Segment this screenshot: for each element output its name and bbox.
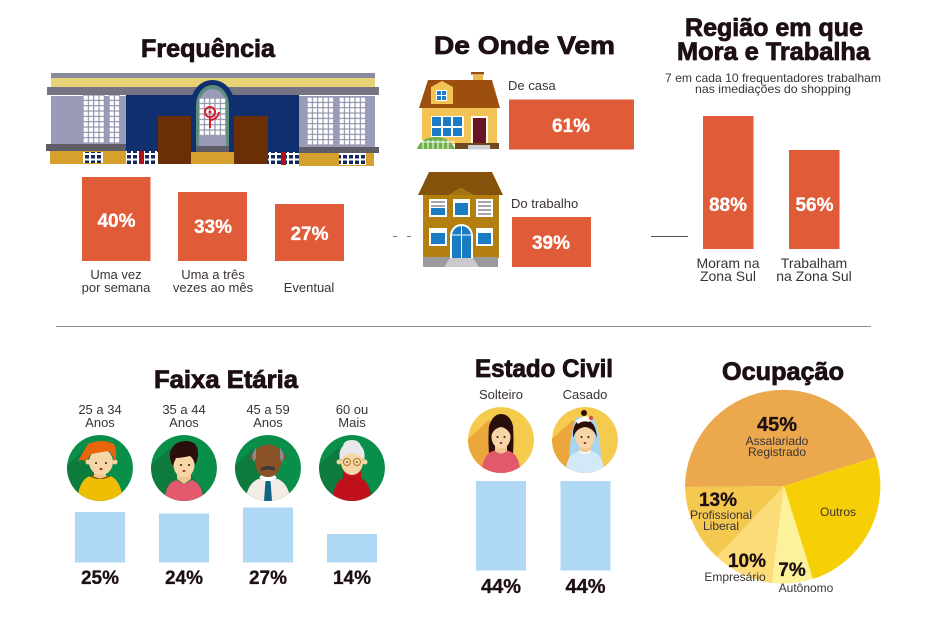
label: uma vez por semana: por semana	[82, 280, 151, 295]
heading: região em que mora e trabalha	[677, 14, 871, 66]
bar: casado 44%	[560, 481, 610, 598]
label: 13% profissional liberal: Profissional	[690, 508, 752, 522]
label: 45% assalariado registrado	[746, 414, 809, 459]
label: 45% assalariado registrado: Registrado	[748, 445, 806, 459]
label: uma a três vezes ao mês: Uma a três	[181, 267, 245, 282]
label: 45 a 59 anos: Anos	[253, 415, 283, 430]
pie chart	[685, 390, 880, 584]
label: 25 a 34 anos: Anos	[85, 415, 115, 430]
label: 13% profissional liberal: 13%	[699, 490, 737, 511]
bar: 27%	[243, 508, 293, 589]
label: 13% profissional liberal	[690, 490, 752, 533]
icon: young man avatar	[67, 435, 133, 508]
panel: região em que mora e trabalha	[665, 14, 881, 284]
panel: faixa etária	[67, 366, 385, 589]
bar: 24%: 24%	[165, 568, 203, 589]
label: 60 ou mais: Mais	[338, 415, 366, 430]
panel: de onde vem	[417, 32, 634, 267]
label: 10% empresário	[704, 551, 766, 584]
bar: solteiro 44%: 44%	[481, 576, 521, 598]
bar: 14%: 14%	[333, 568, 371, 589]
label: outros: Outros	[820, 505, 856, 519]
bar: 25%	[75, 512, 125, 589]
panel: ocupação	[685, 358, 880, 595]
bar: 25%: 25%	[81, 568, 119, 589]
heading: Faixa Etária: Faixa Etária	[154, 366, 299, 394]
panel: frequência	[46, 35, 379, 295]
subtitle: nas imediações do shopping	[695, 82, 851, 96]
label: 35 a 44 anos: Anos	[169, 415, 199, 430]
label: uma a três vezes ao mês: vezes ao mês	[173, 280, 254, 295]
bar: 61%	[509, 100, 634, 150]
bar: solteiro 44%	[476, 481, 526, 598]
bar: casado 44%: 44%	[565, 576, 606, 598]
icon: older man avatar	[235, 435, 301, 508]
label: uma vez por semana: Uma vez	[90, 267, 142, 282]
label: 45 a 59 anos: 45 a 59	[246, 402, 290, 417]
bar: 39%: 39%	[532, 233, 570, 254]
heading: região em que mora e trabalha: Mora e Trabalha	[677, 38, 871, 66]
icon: house	[417, 72, 500, 150]
icon: bride avatar	[552, 407, 618, 480]
label: de casa: De casa	[508, 78, 556, 93]
bar: 40% uma vez por semana	[82, 177, 150, 261]
subtitle	[665, 71, 881, 96]
label: 7% autônomo	[778, 560, 834, 595]
heading: região em que mora e trabalha: Região em que	[685, 14, 863, 42]
infographic canvas	[46, 18, 880, 594]
label: 45% assalariado registrado: 45%	[757, 414, 797, 436]
bar: 56%	[789, 150, 840, 249]
bar: 61%: 61%	[552, 116, 590, 137]
bar: 24%	[159, 514, 209, 589]
label: 7% autônomo: 7%	[778, 560, 806, 581]
label: 13% profissional liberal: Liberal	[703, 519, 739, 533]
label: 7% autônomo: Autônomo	[779, 581, 834, 595]
heading: Estado Civil: Estado Civil	[475, 355, 613, 383]
bar: 27% eventual	[275, 204, 344, 261]
bar: 14%	[327, 534, 377, 589]
label: 10% empresário: 10%	[728, 551, 766, 572]
label: 60 ou mais: 60 ou	[336, 402, 368, 417]
label: do trabalho: Do trabalho	[511, 196, 578, 211]
label: eventual: Eventual	[284, 280, 334, 295]
heading: Frequência: Frequência	[141, 35, 276, 63]
heading: De Onde Vem: De Onde Vem	[434, 32, 615, 60]
label: 35 a 44 anos: 35 a 44	[162, 402, 206, 417]
bar: 56%: 56%	[795, 195, 834, 216]
heading: Ocupação: Ocupação	[722, 358, 844, 386]
label: casado: Casado	[563, 387, 607, 402]
bar: 40% uma vez por semana: 40%	[97, 211, 136, 232]
bar: 27%: 27%	[249, 568, 287, 589]
label: moram na zona sul: Moram na	[696, 255, 760, 271]
icon: woman avatar	[151, 435, 217, 508]
bar: 33% uma a três vezes ao mês: 33%	[194, 217, 232, 238]
label: trabalham na zona sul: Trabalham	[781, 255, 847, 271]
bar: 39%	[512, 217, 591, 267]
bar: 88%	[703, 116, 754, 249]
icon: older woman avatar	[319, 435, 385, 508]
illustration: shopping building	[46, 73, 379, 166]
icon: work building	[418, 172, 503, 267]
label: 45% assalariado registrado: Assalariado	[746, 434, 808, 448]
label: moram na zona sul: Zona Sul	[700, 268, 756, 284]
subtitle: 7 em cada 10 frequentadores trabalham	[665, 71, 881, 85]
label: 10% empresário: Empresário	[704, 570, 766, 584]
bar: 33% uma a três vezes ao mês	[178, 192, 247, 261]
label: trabalham na zona sul: na Zona Sul	[776, 268, 852, 284]
label: solteiro: Solteiro	[479, 387, 523, 402]
label: 25 a 34 anos: 25 a 34	[78, 402, 122, 417]
icon: single woman avatar	[468, 407, 534, 480]
bar: 88%: 88%	[709, 195, 747, 216]
bar: 27% eventual: 27%	[290, 224, 329, 245]
panel: estado civil	[468, 355, 618, 598]
